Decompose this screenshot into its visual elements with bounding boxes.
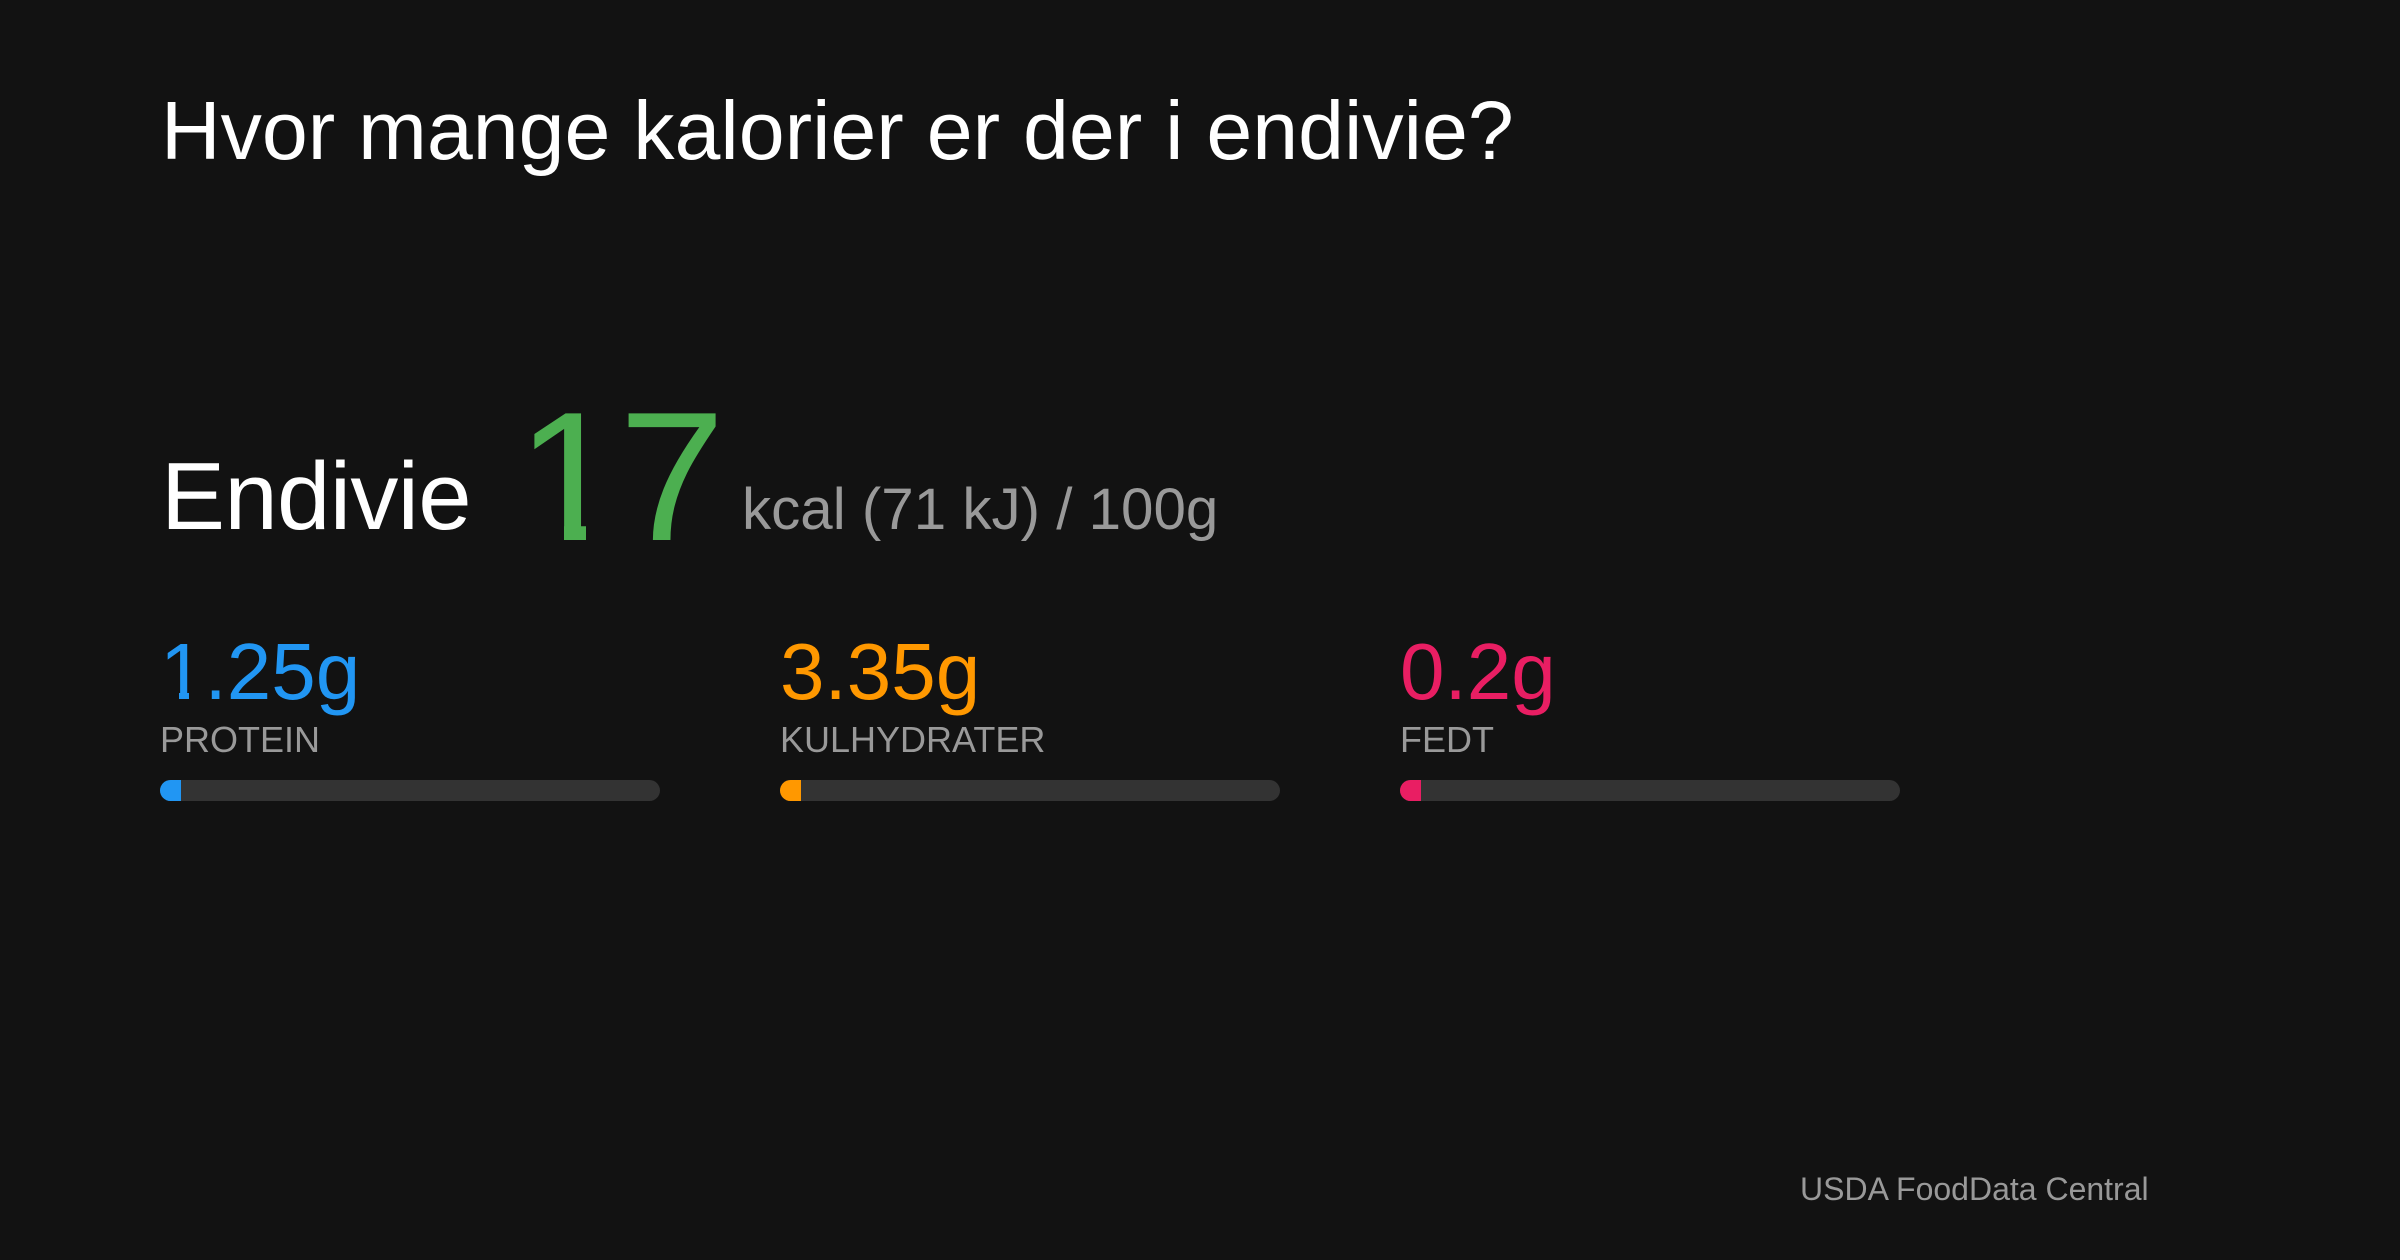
- macro: protein: [160, 627, 660, 801]
- fat value: 0.2g: [1400, 627, 1556, 716]
- carbohydrates value: 3.35g: [780, 627, 980, 716]
- carbohydrates label: KULHYDRATER: [780, 718, 1045, 760]
- protein label: PROTEIN: [160, 718, 320, 760]
- source: USDA FoodData Central: [1800, 1171, 2149, 1207]
- protein bar: [160, 780, 660, 801]
- macro: carbohydrates: [780, 627, 1280, 801]
- macro: fat: [1400, 627, 1900, 801]
- title: Hvor mange kalorier er der i endivie?: [161, 85, 1514, 177]
- fat bar: [1400, 780, 1900, 801]
- protein value: 1.25g: [160, 627, 360, 716]
- calorie unit: kcal (71 kJ) / 100g: [742, 477, 1218, 542]
- carbohydrates bar: [780, 780, 1280, 801]
- fat label: FEDT: [1400, 718, 1494, 760]
- calorie number: 17: [516, 373, 722, 579]
- food name: Endivie: [161, 443, 471, 550]
